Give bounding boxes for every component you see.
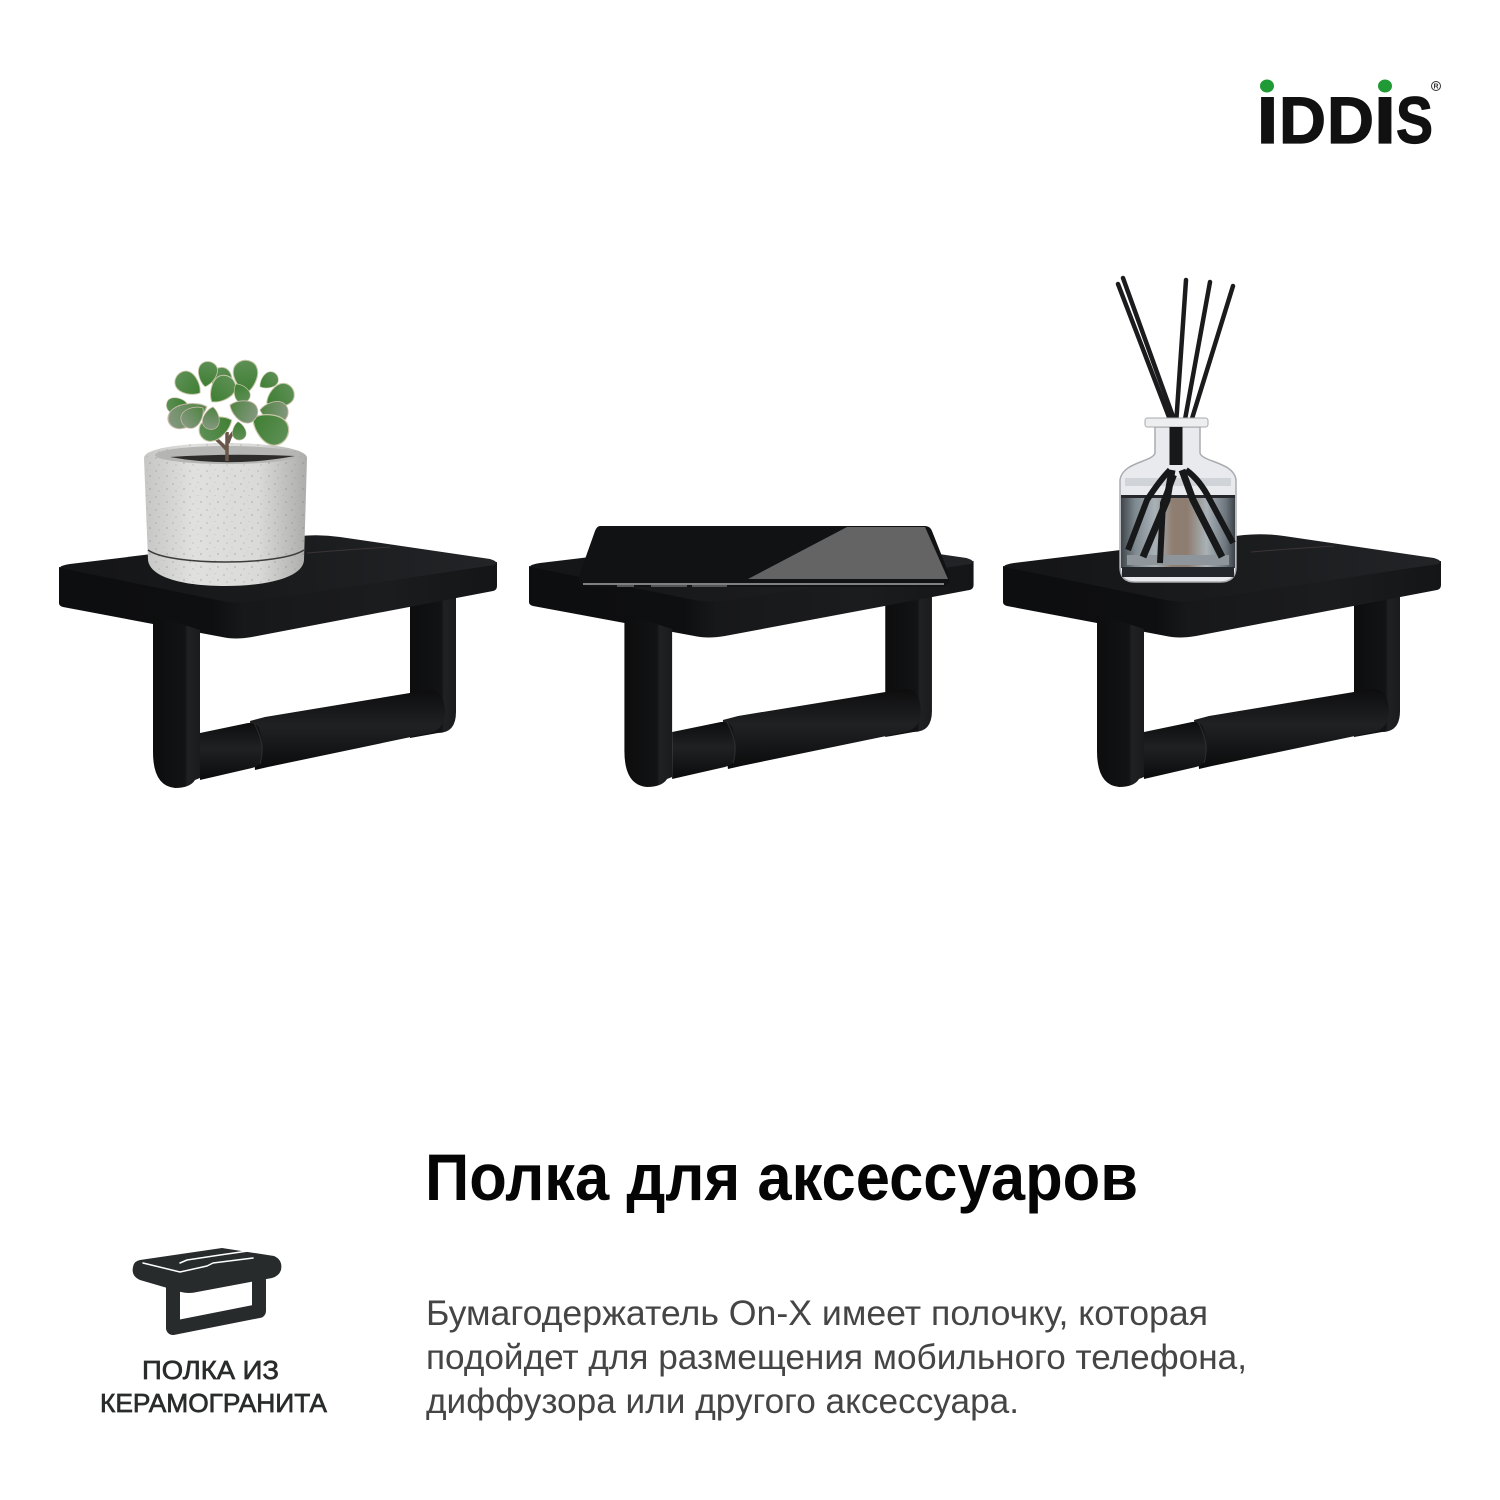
icon: smartphone <box>579 526 950 587</box>
logo: IDDIS <box>1256 80 1440 157</box>
icon: concrete pot <box>144 443 307 586</box>
logo: IDDIS: I <box>1374 83 1396 157</box>
body text: Бумагодержатель On-X имеет полочку, которая <box>426 1294 1208 1333</box>
icon: succulent plant <box>164 360 298 461</box>
product: holder with plant pot <box>59 360 497 788</box>
logo: IDDIS: S <box>1396 83 1433 157</box>
icon: glass diffuser bottle <box>1120 418 1236 582</box>
body text: подойдет для размещения мобильного телефона, <box>426 1338 1247 1377</box>
product: holder with diffuser <box>1003 278 1441 787</box>
icon: shelf holder pictogram <box>133 1248 281 1328</box>
icon label: ПОЛКА ИЗ <box>142 1355 279 1385</box>
product: holder with phone <box>529 526 974 787</box>
icon label <box>100 1355 328 1418</box>
logo: IDDIS: I <box>1256 83 1278 157</box>
heading: Полка для аксессуаров <box>425 1140 1138 1214</box>
body text: диффузора или другого аксессуара. <box>426 1382 1019 1421</box>
logo: IDDIS: D <box>1327 83 1374 157</box>
logo: IDDIS: R <box>1433 84 1439 90</box>
logo: IDDIS: D <box>1279 83 1326 157</box>
icon label: КЕРАМОГРАНИТА <box>100 1388 328 1418</box>
body text <box>426 1294 1247 1421</box>
icon: reed sticks <box>1118 278 1233 425</box>
